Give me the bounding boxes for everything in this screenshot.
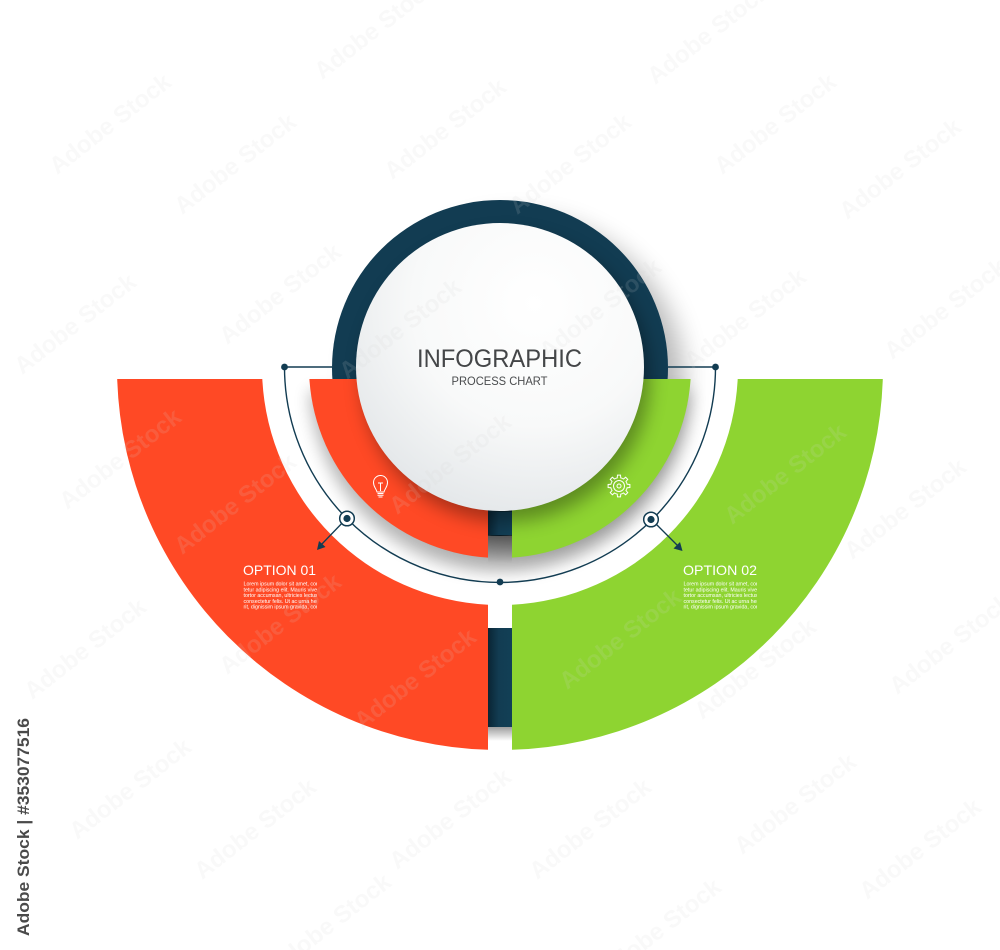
watermark: Adobe Stock bbox=[839, 453, 972, 565]
central disc shadow bbox=[362, 234, 650, 522]
title: INFOGRAPHIC bbox=[417, 345, 582, 373]
lower connector bar bbox=[488, 628, 512, 727]
watermark: Adobe Stock bbox=[334, 273, 467, 385]
watermark: Adobe Stock bbox=[214, 568, 347, 680]
watermark: Adobe Stock bbox=[834, 113, 967, 225]
watermark: Adobe Stock bbox=[524, 773, 657, 885]
text block: option 01: Lorem ipsum dolor sit amet, consectetur bbox=[244, 582, 338, 588]
text block: option 02: Lorem ipsum dolor sit amet, consectetur bbox=[684, 582, 778, 588]
watermark: Adobe Stock bbox=[384, 408, 517, 520]
lower shadow band under inner segments bbox=[309, 391, 691, 572]
connector arc bbox=[281, 364, 719, 585]
watermark: Adobe Stock bbox=[214, 238, 347, 350]
panel: option 02 outer segment bbox=[512, 379, 883, 750]
text block: option 01: tetur adipiscing elit. Mauris viverra bbox=[244, 587, 324, 593]
text block: option 01 bbox=[244, 566, 317, 610]
watermark: Adobe Stock bbox=[44, 68, 177, 180]
watermark: Adobe Stock bbox=[709, 68, 842, 180]
watermark: Adobe Stock bbox=[379, 73, 512, 185]
watermark: Adobe Stock bbox=[189, 773, 322, 885]
text block: option 02: tortor accumsan, ultricies lectus nec bbox=[684, 593, 768, 599]
icon: light bulb bbox=[374, 476, 388, 497]
text block: option 02: rit, dignissim ipsum gravida, consequat bbox=[684, 605, 775, 611]
watermark: Adobe Stock bbox=[534, 253, 667, 365]
text block: option 01: tortor accumsan, ultricies lectus nec bbox=[244, 593, 328, 599]
watermark: Adobe Stock bbox=[54, 403, 187, 515]
arrow: option 01 bbox=[317, 511, 354, 550]
title bbox=[417, 345, 582, 388]
watermark: Adobe Stock bbox=[854, 793, 987, 905]
watermark: Adobe Stock bbox=[689, 613, 822, 725]
text block: option 02: OPTION 02 bbox=[683, 562, 757, 578]
center connector bar bbox=[488, 512, 512, 535]
watermark: Adobe Stock bbox=[349, 623, 482, 735]
stock id label: Adobe Stock | #353077516 bbox=[14, 718, 33, 936]
watermark: Adobe Stock bbox=[554, 583, 687, 695]
text block: option 01: consectetur felis. Ut ac urna hendrerit bbox=[244, 599, 332, 605]
central disc bbox=[356, 223, 644, 511]
text block: option 02: tetur adipiscing elit. Mauris viverra bbox=[684, 587, 764, 593]
gap shadow lower bbox=[488, 727, 512, 741]
watermark: Adobe Stock bbox=[679, 263, 812, 375]
watermark: Adobe Stock bbox=[169, 448, 302, 560]
watermark: Adobe Stock bbox=[19, 593, 152, 705]
gap shadow upper bbox=[488, 535, 512, 563]
watermark: Adobe Stock bbox=[504, 108, 637, 220]
watermark: Adobe Stock bbox=[384, 763, 517, 875]
text block: option 01: rit, dignissim ipsum gravida, consequat bbox=[244, 605, 335, 611]
dark ring bbox=[332, 200, 668, 536]
watermark: Adobe Stock bbox=[169, 108, 302, 220]
watermark: Adobe Stock bbox=[729, 748, 862, 860]
watermark: Adobe Stock bbox=[64, 733, 197, 845]
icon: gear bbox=[608, 475, 630, 497]
title: PROCESS CHART bbox=[452, 374, 548, 388]
text block: option 02 bbox=[684, 566, 757, 610]
panel: option 01 outer segment bbox=[117, 379, 488, 750]
ring shadow bbox=[352, 218, 684, 550]
text block: option 01: OPTION 01 bbox=[243, 562, 316, 578]
panel: option 02 inner segment bbox=[512, 379, 691, 558]
text block: option 02: consectetur felis. Ut ac urna hendrerit bbox=[684, 599, 772, 605]
watermark: Adobe Stock bbox=[719, 418, 852, 530]
watermark: Adobe Stock bbox=[9, 268, 142, 380]
arrow: option 02 bbox=[644, 512, 682, 551]
panel: option 01 inner segment bbox=[309, 379, 488, 558]
